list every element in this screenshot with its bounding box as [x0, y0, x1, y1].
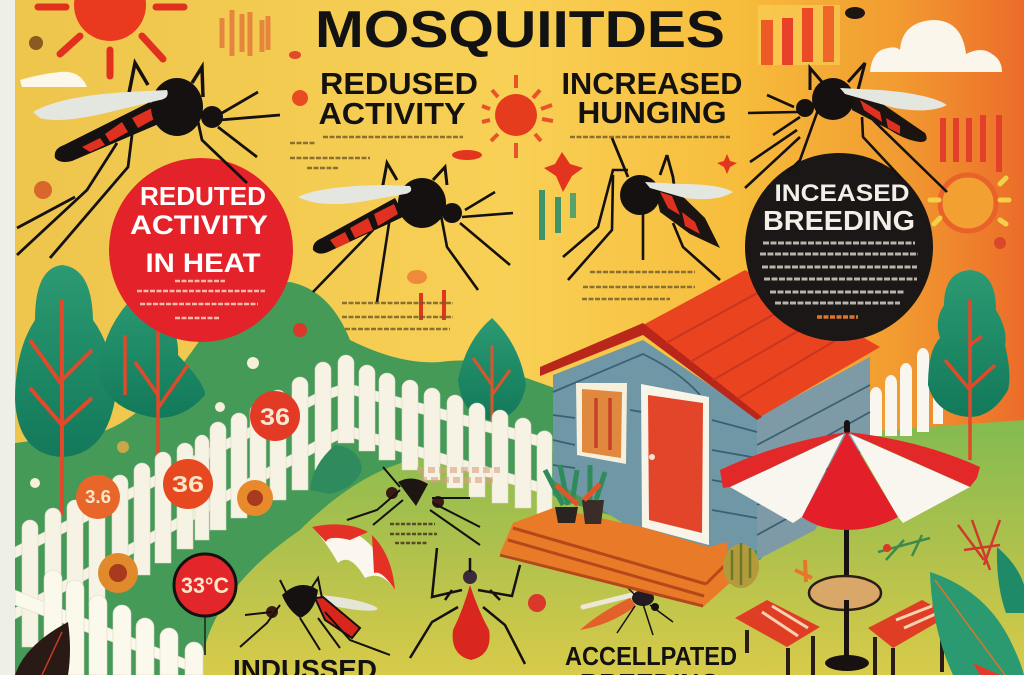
door	[641, 384, 709, 545]
icon: sunflower marks	[98, 480, 273, 593]
panel: black circle increased breeding: BREEDING	[763, 205, 915, 236]
leaf: bottom right	[930, 547, 1024, 675]
panel: black circle increased breeding: INCEASED	[774, 180, 910, 207]
tree: second left	[100, 290, 205, 470]
house wall front	[553, 340, 757, 570]
label: increased hunting: INCREASED	[562, 66, 742, 101]
icon: top-left sun	[29, 0, 184, 76]
umbrella	[720, 420, 980, 665]
garbled text on fence	[417, 470, 500, 480]
temperature badge 4	[174, 554, 236, 655]
panel: red circle reduced activity: ACTIVITY	[130, 210, 268, 240]
mosquito: red body	[410, 548, 525, 664]
lawn	[200, 420, 1024, 675]
mosquito: top right	[745, 63, 947, 192]
label: increased hunting	[562, 66, 742, 130]
label: increased hunting: HUNGING	[578, 95, 726, 130]
mosquito: bottom left	[240, 578, 390, 655]
label: reduced activity	[318, 66, 478, 131]
temperature badge 4: 33°C	[181, 573, 229, 598]
garbled caption lines	[290, 137, 730, 329]
icon: small umbrella	[312, 524, 395, 590]
panel: red circle reduced activity: IN HEAT	[146, 248, 261, 278]
mosquito: ground small	[347, 467, 480, 545]
title: MOSQUIITDES	[315, 1, 725, 59]
left margin strip	[0, 0, 15, 675]
house	[500, 270, 880, 607]
garbled caption under ground mosquito	[390, 524, 437, 543]
plants bottom right	[795, 520, 1000, 582]
temperature badge 2	[76, 475, 120, 519]
ornament: bug left of steps	[528, 594, 546, 612]
icon: plant by porch	[723, 543, 759, 588]
temperature badge 1: 36	[260, 404, 290, 431]
mosquito: top left	[17, 63, 280, 258]
panel: black circle increased breeding	[745, 153, 933, 341]
icon: small white cloud left	[20, 72, 87, 87]
temperature badge 2: 3.6	[85, 487, 111, 507]
fence: foreground left	[15, 570, 203, 675]
roof	[643, 270, 880, 417]
small flowers and sparks	[34, 150, 737, 320]
label: reduced activity: REDUSED	[320, 66, 478, 101]
roof shingle lines	[666, 285, 853, 399]
house wall side	[757, 357, 870, 560]
window	[576, 383, 627, 464]
chair left	[735, 600, 820, 675]
mosquito: centre	[298, 163, 513, 302]
roof gable eave	[540, 323, 762, 420]
planters	[555, 507, 578, 523]
mosquito: centre right	[563, 138, 733, 280]
mosquito: bottom centre	[580, 580, 673, 635]
icon: right sun outline	[930, 175, 1009, 249]
tree: right	[928, 270, 1009, 460]
small flowers on grass	[30, 323, 307, 488]
panel: red circle reduced activity: REDUTED	[140, 181, 266, 211]
house siding lines	[553, 354, 870, 535]
decorative bars right	[943, 115, 999, 172]
decorative bars top left	[222, 10, 308, 106]
tree: centre	[458, 318, 526, 425]
green hills	[0, 282, 1024, 675]
chair right	[868, 600, 950, 675]
porch	[500, 508, 731, 607]
icon: centre sun	[482, 75, 553, 158]
temperature badge 3	[163, 459, 213, 509]
decorative bars top right	[758, 5, 865, 65]
patio table	[809, 576, 881, 671]
label: reduced activity: ACTIVITY	[318, 96, 466, 131]
temperature badge 1	[250, 391, 300, 441]
fence: back	[15, 355, 552, 647]
heading: bottom right: ACCELLPATED	[565, 641, 737, 671]
bush by fence	[310, 445, 362, 494]
small bars centre	[542, 190, 573, 240]
tree: far left	[15, 265, 115, 515]
panel: red circle reduced activity	[109, 158, 293, 342]
temperature badge 3: 36	[172, 471, 204, 497]
leaf: bottom left	[15, 622, 70, 675]
icon: cloud	[870, 20, 1002, 72]
fence: right behind umbrella	[870, 344, 943, 436]
